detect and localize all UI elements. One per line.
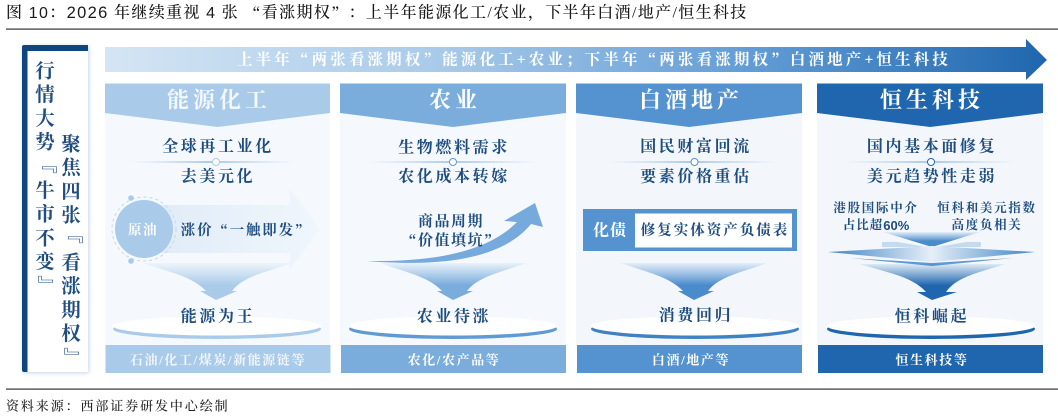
drivers: 要素价格重估 [640,166,752,186]
text: market trend [30,60,65,295]
source note: 资料来源：西部证券研发中心绘制 [6,398,230,414]
text: commodity cycle [401,213,501,252]
text: negative correlation [937,200,1037,232]
text: market trend: 行情大势 [31,60,59,155]
text: focus on four: 『 [56,224,88,244]
sector strip [577,345,802,373]
sector strip [106,345,330,373]
debt resolution box: 修复实体资产负债表 [641,221,789,239]
sector strip [818,345,1043,373]
panel: energy and chemicals: 能源化工 [167,88,271,112]
text: focus on four [56,133,91,367]
drivers: 美元趋势性走弱 [867,166,997,186]
drivers: 国民财富回流 [640,136,752,156]
text: commodity cycle: 商品周期 [418,213,484,230]
text: negative correlation: 高度负相关 [951,217,1023,232]
text: focus on four: 聚焦四张 [57,133,85,228]
text: HK brokers share [833,200,919,232]
conclusion: 能源为王 [181,306,255,326]
drivers [845,136,1015,186]
text: HK brokers share: 占比超60% [843,217,910,232]
panel: agriculture: 农业 [428,88,481,112]
curved up arrow [367,203,543,263]
header [340,84,566,127]
panel: energy and chemicals: 石油/化工/煤炭/新能源链等 [130,352,306,368]
top timeline arrow [105,39,1047,80]
funnel arrow [143,263,291,300]
bottom rule [6,388,1058,390]
panel: baijiu and property: 白酒/地产等 [652,352,730,368]
sector strip [341,345,566,373]
header [105,84,330,127]
drivers: 生物燃料需求 [398,138,510,156]
header [576,84,802,127]
panel: baijiu and property: 白酒地产 [639,88,743,112]
panel: hang seng tech: 恒生科技等 [895,352,969,368]
panel: energy and chemicals [105,84,330,373]
conclusion: 农业待涨 [416,306,491,326]
conclusion: 恒科崛起 [895,306,969,326]
icon: crude oil circle: 原油 [128,222,158,238]
panel: left vertical headline [22,45,91,372]
text: focus on four: 看涨期权 [57,252,85,347]
title rule [6,28,1058,30]
conclusion: 消费回归 [659,306,733,324]
platform ellipse [113,316,321,339]
text: price rise: 涨价“一触即发” [181,220,311,242]
text: HK brokers share: 港股国际中介 [833,200,919,215]
panel: hang seng tech: 恒生科技 [880,88,984,112]
funnel arrow [380,263,526,300]
text: market trend: 牛市不变 [31,180,59,275]
drivers [130,138,295,186]
funnel arrow [621,263,767,300]
text: negative correlation: 恒科和美元指数 [937,200,1037,215]
drivers: 农化成本转嫁 [397,166,510,186]
debt resolution box: 化债 [593,220,627,240]
panel: baijiu and property [576,84,802,373]
debt resolution box [583,209,797,251]
drivers [368,138,538,186]
icon: crude oil circle [112,195,176,264]
panel: agriculture [340,84,566,373]
text: market trend: 『 [30,154,62,174]
drivers: 全球再工业化 [162,138,274,156]
drivers: 去美元化 [181,166,255,186]
panel: hang seng tech [817,84,1043,373]
arrow: price rise [144,189,320,269]
platform ellipse [349,316,557,339]
platform ellipse [591,316,799,339]
arrow caption: 上半年“两张看涨期权”能源化工+农业；下半年“两张看涨期权”白酒地产+恒生科技 [237,49,951,71]
text: commodity cycle: “价值填坑” [401,230,501,252]
platform ellipse [827,316,1035,339]
title: 图 10：2026 年继续重视 4 张 “看涨期权”：上半年能源化工/农业，下半年白酒/地产/恒生科技 [6,2,748,24]
panel: agriculture: 农化/农产品等 [407,352,500,368]
header [817,84,1043,127]
drivers: 国内基本面修复 [867,136,997,156]
stacked layers funnel [828,232,1035,300]
drivers [608,136,778,186]
text: market trend: 』 [33,275,65,295]
text: focus on four: 』 [59,347,91,367]
